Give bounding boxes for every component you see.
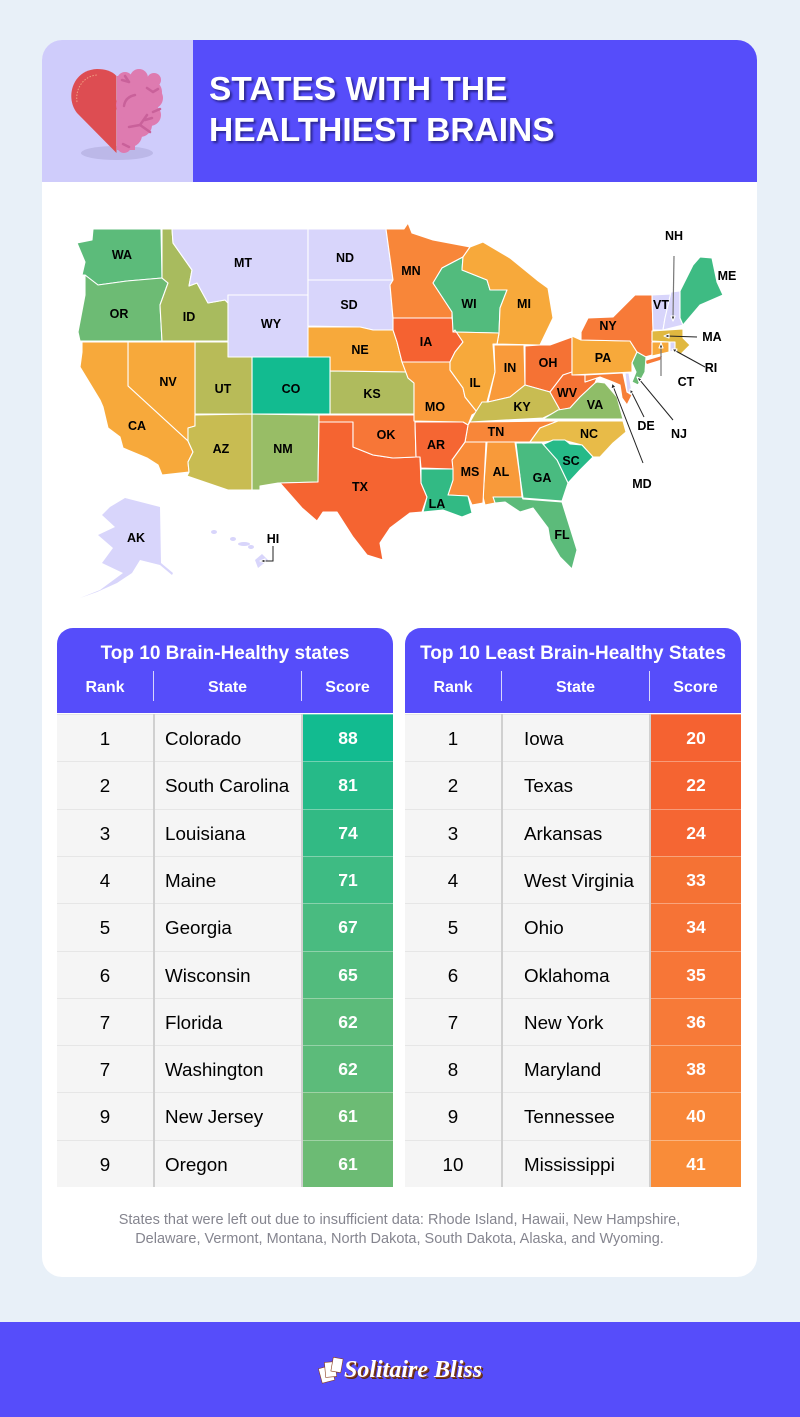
- row 4: [405, 856, 741, 904]
- table header: [57, 628, 393, 713]
- state labels: MT: [234, 256, 252, 270]
- state labels: AK: [127, 531, 145, 545]
- state labels: WA: [112, 248, 132, 262]
- row 6: 35: [686, 965, 706, 985]
- state labels: AZ: [213, 442, 230, 456]
- main white panel: [42, 40, 757, 1277]
- row 1: [57, 714, 393, 762]
- row 9: 9: [100, 1106, 110, 1127]
- row 8: 8: [448, 1059, 458, 1080]
- state: West Virginia: [550, 372, 597, 410]
- state: Utah: [195, 342, 252, 414]
- state labels: MA: [702, 330, 722, 344]
- title: HEALTHIEST BRAINS: [209, 112, 555, 149]
- state labels: IA: [420, 335, 432, 349]
- row 5: [405, 903, 741, 951]
- header title block: [193, 40, 757, 182]
- state: Massachusetts: [652, 329, 690, 355]
- state: Alaska: [80, 498, 173, 598]
- state: Georgia: [516, 443, 568, 501]
- row 4: West Virginia: [524, 870, 634, 891]
- state: Minnesota: [386, 223, 470, 318]
- row 8: 62: [338, 1059, 358, 1079]
- row 1: 1: [448, 728, 458, 749]
- US choropleth map: [78, 224, 736, 598]
- row 7: [57, 998, 393, 1046]
- row 6: 6: [448, 965, 458, 986]
- state labels: DE: [637, 419, 655, 433]
- state: Washington: [77, 229, 162, 285]
- row 7: 7: [448, 1012, 458, 1033]
- table header: Score: [673, 679, 718, 696]
- state: Indiana: [488, 345, 525, 402]
- state labels: MI: [517, 297, 531, 311]
- row 6: [57, 951, 393, 999]
- state labels: UT: [215, 382, 232, 396]
- state: Rhode Island: [670, 342, 675, 352]
- row 1: Iowa: [524, 728, 564, 749]
- row 1: 20: [686, 728, 706, 748]
- state labels: MS: [461, 465, 479, 479]
- state: Ohio: [525, 337, 572, 392]
- table header: [405, 628, 741, 713]
- row 10: 9: [100, 1154, 110, 1175]
- state: Delaware: [625, 373, 632, 393]
- state labels: GA: [533, 471, 551, 485]
- state labels: NH: [665, 229, 683, 243]
- state: New Jersey: [632, 352, 646, 385]
- row 4: 4: [448, 870, 458, 891]
- state: Maine: [680, 257, 723, 325]
- state labels: NM: [273, 442, 293, 456]
- row 1: [405, 714, 741, 762]
- state labels: VT: [653, 298, 669, 312]
- state labels: NV: [159, 375, 177, 389]
- row 10: 61: [338, 1154, 358, 1174]
- state: Iowa: [393, 318, 463, 362]
- row 3: 24: [686, 823, 706, 843]
- row 10: Oregon: [165, 1154, 228, 1175]
- row 2: [57, 761, 393, 809]
- row 10: [57, 1140, 393, 1188]
- state: Michigan: [462, 242, 553, 345]
- footer band: [0, 1322, 800, 1417]
- state labels: NC: [580, 427, 598, 441]
- state labels: SD: [340, 298, 358, 312]
- row 6: 6: [100, 965, 110, 986]
- state: New York: [581, 295, 653, 357]
- state labels: [110, 229, 736, 546]
- state: Arizona: [187, 414, 252, 490]
- state labels: NE: [351, 343, 369, 357]
- state labels: RI: [705, 361, 717, 375]
- leader arrows: [260, 256, 705, 563]
- row 7: New York: [524, 1012, 603, 1033]
- title: [209, 71, 557, 149]
- row 3: Louisiana: [165, 823, 245, 844]
- state labels: WI: [461, 297, 477, 311]
- footnote: [119, 1212, 680, 1247]
- state labels: NJ: [671, 427, 687, 441]
- state labels: ND: [336, 251, 354, 265]
- row 3: [405, 809, 741, 857]
- row 3: [57, 809, 393, 857]
- row 9: 40: [686, 1106, 706, 1126]
- row 7: 62: [338, 1012, 358, 1032]
- row 10: [405, 1140, 741, 1188]
- state: Virginia: [543, 382, 623, 419]
- row 8: 7: [100, 1059, 110, 1080]
- row 1: 1: [100, 728, 110, 749]
- row 2: 22: [686, 775, 706, 795]
- icon: playing cards: [318, 1356, 344, 1384]
- row 4: 71: [338, 870, 358, 890]
- table: top 10 least brain-healthy states: [405, 628, 741, 1187]
- row 8: Maryland: [524, 1059, 601, 1080]
- state: Illinois: [450, 330, 499, 415]
- state: Arkansas: [415, 422, 468, 469]
- row 8: [57, 1045, 393, 1093]
- state: North Carolina: [530, 421, 626, 457]
- row 8: Washington: [165, 1059, 263, 1080]
- row 5: Georgia: [165, 917, 232, 938]
- state: Alabama: [483, 442, 522, 505]
- row 5: Ohio: [524, 917, 564, 938]
- state labels: HI: [267, 532, 279, 546]
- state: Texas: [280, 422, 427, 560]
- row 4: Maine: [165, 870, 216, 891]
- state labels: ME: [718, 269, 736, 283]
- state labels: CT: [678, 375, 695, 389]
- row 5: 34: [686, 917, 706, 937]
- state labels: NY: [599, 319, 617, 333]
- table header: Score: [325, 679, 370, 696]
- row 6: 65: [338, 965, 358, 985]
- row 4: 33: [686, 870, 706, 890]
- row 3: Arkansas: [524, 823, 602, 844]
- state: Oklahoma: [319, 415, 416, 458]
- row 3: 3: [100, 823, 110, 844]
- state labels: MN: [401, 264, 421, 278]
- state labels: FL: [554, 528, 570, 542]
- state: Connecticut: [652, 342, 669, 356]
- row 2: Texas: [524, 775, 573, 796]
- row 9: 61: [338, 1106, 358, 1126]
- row 5: 5: [448, 917, 458, 938]
- title: STATES WITH THE: [209, 71, 507, 108]
- state: New Hampshire: [663, 291, 683, 330]
- state labels: AR: [427, 438, 445, 452]
- state: Nevada: [128, 342, 195, 441]
- row 10: 41: [686, 1154, 706, 1174]
- state: South Dakota: [308, 280, 393, 330]
- row 8: [405, 1045, 741, 1093]
- icon: half heart half brain: [71, 69, 163, 160]
- state: Wisconsin: [433, 257, 507, 333]
- state labels: ID: [183, 310, 195, 324]
- row 1: 88: [338, 728, 358, 748]
- state: Florida: [493, 497, 577, 569]
- row 7: [405, 998, 741, 1046]
- state: Oregon: [78, 275, 168, 341]
- state labels: SC: [562, 454, 580, 468]
- row 5: 5: [100, 917, 110, 938]
- row 2: 81: [338, 775, 358, 795]
- table header: Rank: [433, 679, 473, 696]
- table: top 10 brain-healthy states: [57, 628, 393, 1187]
- row 10: 10: [443, 1154, 463, 1175]
- state labels: MO: [425, 400, 445, 414]
- row 9: [57, 1092, 393, 1140]
- state: South Carolina: [542, 440, 593, 483]
- row 2: [405, 761, 741, 809]
- row 3: 74: [338, 823, 358, 843]
- row 9: New Jersey: [165, 1106, 263, 1127]
- state: Hawaii: [211, 530, 268, 568]
- state: North Dakota: [308, 229, 393, 280]
- row 7: 36: [686, 1012, 706, 1032]
- table header: Top 10 Brain-Healthy states: [101, 643, 349, 664]
- table header: State: [556, 679, 595, 696]
- state: New York, Long Island: [645, 356, 662, 364]
- row 7: Florida: [165, 1012, 222, 1033]
- state labels: AL: [493, 465, 510, 479]
- row 7: 7: [100, 1012, 110, 1033]
- state labels: KS: [363, 387, 381, 401]
- state: Mississippi: [448, 442, 486, 505]
- state: Montana: [172, 229, 308, 303]
- state labels: WY: [261, 317, 282, 331]
- state labels: LA: [429, 497, 445, 511]
- footnote: States that were left out due to insufficient data: Rhode Island, Hawaii, New Hampshire,: [119, 1212, 680, 1228]
- state: Colorado: [252, 357, 330, 414]
- row 5: 67: [338, 917, 358, 937]
- table header: State: [208, 679, 247, 696]
- footnote: Delaware, Vermont, Montana, North Dakota, South Dakota, Alaska, and Wyoming.: [135, 1231, 664, 1247]
- row 6: Oklahoma: [524, 965, 610, 986]
- state: Tennessee: [465, 421, 558, 442]
- row 9: [405, 1092, 741, 1140]
- state labels: OH: [539, 356, 557, 370]
- state: Kentucky: [470, 385, 560, 422]
- state labels: TN: [488, 425, 504, 439]
- state: California: [80, 342, 193, 475]
- state labels: CA: [128, 419, 146, 433]
- state: Missouri: [402, 362, 477, 425]
- state: Pennsylvania: [572, 336, 637, 375]
- header icon block: [42, 40, 193, 182]
- row 2: 2: [100, 775, 110, 796]
- state: Louisiana: [421, 469, 472, 517]
- row 6: [405, 951, 741, 999]
- state labels: VA: [587, 398, 603, 412]
- row 9: 9: [448, 1106, 458, 1127]
- state labels: WV: [557, 386, 578, 400]
- row 1: Colorado: [165, 728, 241, 749]
- state labels: KY: [513, 400, 531, 414]
- table header: Top 10 Least Brain-Healthy States: [420, 643, 726, 664]
- state: Wyoming: [228, 295, 308, 357]
- state labels: TX: [352, 480, 369, 494]
- row 4: 4: [100, 870, 110, 891]
- state labels: CO: [282, 382, 301, 396]
- row 8: 38: [686, 1059, 706, 1079]
- state labels: PA: [595, 351, 611, 365]
- state: Maryland: [585, 373, 632, 405]
- state: Kansas: [330, 371, 414, 414]
- state: Nebraska: [308, 327, 407, 372]
- state: Vermont: [652, 294, 672, 330]
- state: New Mexico: [252, 414, 319, 490]
- state labels: OK: [377, 428, 395, 442]
- state labels: IN: [504, 361, 516, 375]
- state labels: IL: [469, 376, 481, 390]
- row 6: Wisconsin: [165, 965, 251, 986]
- row 3: 3: [448, 823, 458, 844]
- row 5: [57, 903, 393, 951]
- row 2: 2: [448, 775, 458, 796]
- state labels: OR: [110, 307, 128, 321]
- state: Idaho: [160, 229, 228, 341]
- table header: Rank: [85, 679, 125, 696]
- row 4: [57, 856, 393, 904]
- state labels: MD: [632, 477, 652, 491]
- row 2: South Carolina: [165, 775, 289, 796]
- row 9: Tennessee: [524, 1106, 615, 1127]
- row 10: Mississippi: [524, 1154, 615, 1175]
- logo: Solitaire Bliss: [344, 1357, 482, 1383]
